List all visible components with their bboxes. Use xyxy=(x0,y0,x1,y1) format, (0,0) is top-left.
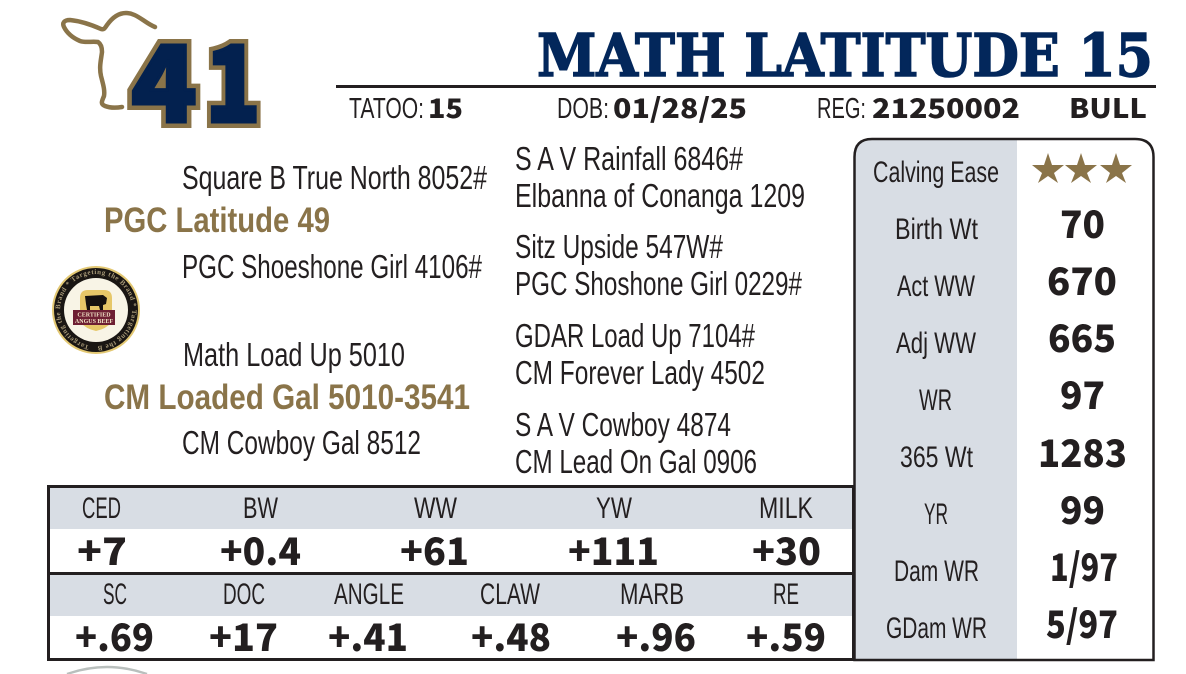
performance labels: Calving Ease xyxy=(873,156,999,189)
info row: 15 xyxy=(428,87,463,126)
performance values: 1283 xyxy=(1038,423,1127,478)
EPD values row 2: +.96 xyxy=(616,607,696,662)
pedigree: dam side: CM Loaded Gal 5010-3541 xyxy=(104,378,470,417)
performance labels: Dam WR xyxy=(894,555,979,588)
info row: TATOO: xyxy=(349,93,424,125)
EPD labels row 2: DOC xyxy=(223,578,265,611)
info row: DOB: xyxy=(557,93,609,125)
performance labels: YR xyxy=(924,498,948,531)
pedigree: grandparents: CM Forever Lady 4502 xyxy=(515,354,765,391)
info row: REG: xyxy=(817,93,866,125)
EPD labels row 2: SC xyxy=(103,578,127,611)
lot number xyxy=(131,0,261,153)
info row xyxy=(349,87,1147,126)
performance values: 1/97 xyxy=(1050,537,1118,592)
pedigree: sire side: PGC Shoeshone Girl 4106# xyxy=(182,248,482,285)
info row: 01/28/25 xyxy=(613,87,747,126)
lot number: 1 xyxy=(205,0,261,153)
performance values: 70 xyxy=(1060,194,1105,249)
performance labels: Adj WW xyxy=(896,327,977,360)
performance labels: Act WW xyxy=(897,270,975,303)
lot number: 1 xyxy=(205,0,261,153)
EPD values row 2: +.41 xyxy=(328,607,408,662)
EPD values row 1 xyxy=(77,521,821,576)
pedigree: grandparents: CM Lead On Gal 0906 xyxy=(515,443,757,480)
EPD labels row 1: MILK xyxy=(759,492,813,525)
pedigree: dam side: Math Load Up 5010 xyxy=(183,336,405,373)
EPD labels row 2 xyxy=(103,578,799,611)
EPD labels row 2: MARB xyxy=(620,578,684,611)
performance values: 670 xyxy=(1047,251,1117,306)
lot number: 4 xyxy=(131,0,197,153)
EPD values row 2: +.69 xyxy=(75,607,154,662)
EPD values row 1: +111 xyxy=(568,521,659,576)
performance values xyxy=(1038,194,1127,649)
EPD values row 2: +.48 xyxy=(471,607,551,662)
pedigree: dam side: CM Cowboy Gal 8512 xyxy=(182,424,421,461)
pedigree: grandparents: S A V Cowboy 4874 xyxy=(515,406,731,443)
EPD values row 2: +17 xyxy=(209,607,278,662)
EPD values row 1: +7 xyxy=(77,521,127,576)
performance values: 5/97 xyxy=(1046,594,1118,649)
EPD values row 1: +30 xyxy=(752,521,821,576)
icon: certified angus beef badge: CERTIFIED xyxy=(77,312,111,318)
pedigree: sire side xyxy=(104,159,487,285)
performance labels: WR xyxy=(919,384,952,417)
performance labels: Birth Wt xyxy=(895,213,979,246)
EPD values row 1: +0.4 xyxy=(220,521,301,576)
EPD labels row 1: BW xyxy=(243,492,278,525)
performance values: 665 xyxy=(1048,308,1116,363)
pedigree: grandparents: PGC Shoshone Girl 0229# xyxy=(515,265,802,302)
EPD labels row 2: RE xyxy=(773,578,799,611)
pedigree: sire side: PGC Latitude 49 xyxy=(104,201,330,240)
performance labels: GDam WR xyxy=(886,612,987,645)
info row: BULL xyxy=(1069,87,1147,126)
EPD labels row 1: CED xyxy=(82,492,121,525)
panel: EPD table xyxy=(48,486,854,662)
EPD labels row 2: ANGLE xyxy=(334,578,404,611)
EPD values row 2: +.59 xyxy=(746,607,826,662)
panel: performance data xyxy=(854,139,1154,660)
performance values: 99 xyxy=(1060,480,1105,535)
EPD labels row 1: YW xyxy=(596,492,633,525)
performance labels: 365 Wt xyxy=(900,441,974,474)
pedigree: dam side xyxy=(104,336,470,461)
icon: cow head outline xyxy=(63,13,155,108)
lot number: 4 xyxy=(131,0,197,153)
EPD values row 1: +61 xyxy=(400,521,469,576)
pedigree: grandparents: Sitz Upside 547W# xyxy=(515,228,723,265)
performance values: 97 xyxy=(1060,365,1105,420)
header rule xyxy=(336,85,1156,88)
EPD labels row 2: CLAW xyxy=(480,578,540,611)
EPD labels row 1 xyxy=(82,492,813,525)
pedigree: grandparents: Elbanna of Conanga 1209 xyxy=(515,177,805,214)
pedigree: grandparents xyxy=(515,140,805,480)
cropped seal arc at bottom edge xyxy=(67,667,147,674)
icon: certified angus beef badge: ANGUS BEEF xyxy=(75,319,113,325)
icon: certified angus beef badge xyxy=(52,266,140,354)
info row: 21250002 xyxy=(872,87,1020,126)
performance labels xyxy=(873,156,999,645)
pedigree: sire side: Square B True North 8052# xyxy=(182,159,487,196)
pedigree: grandparents: S A V Rainfall 6846# xyxy=(515,140,743,177)
EPD values row 2 xyxy=(75,607,826,662)
pedigree: grandparents: GDAR Load Up 7104# xyxy=(515,317,755,354)
icon: three stars xyxy=(1032,153,1132,183)
EPD labels row 1: WW xyxy=(414,492,458,525)
